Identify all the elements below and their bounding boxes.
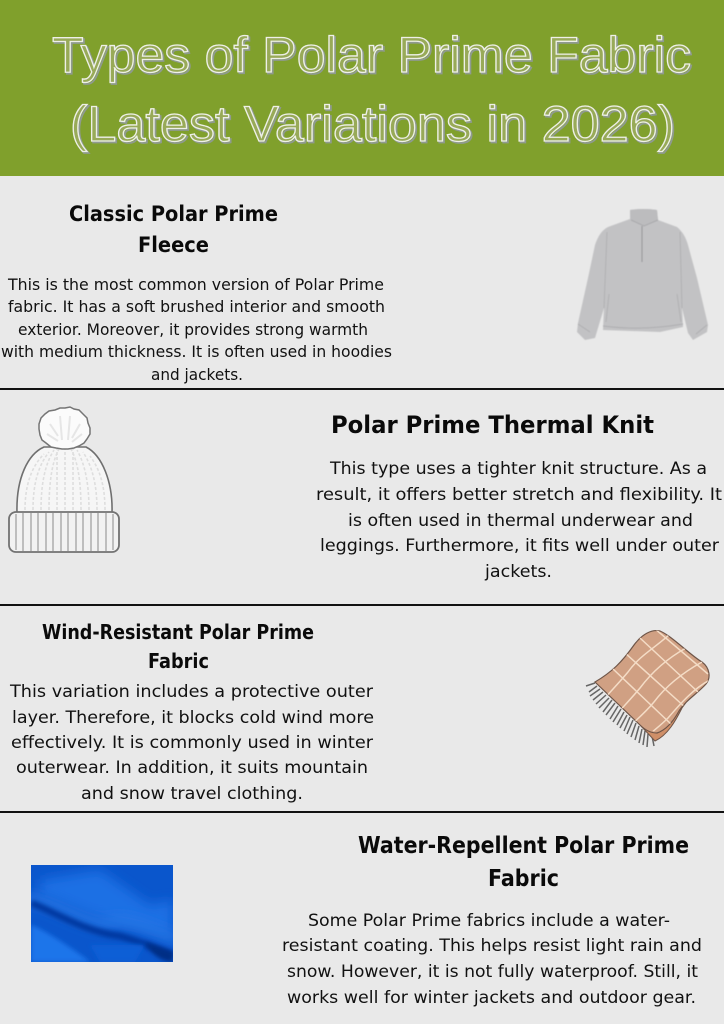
text: thermal knit description: result, it offers better stretch and flexibility. It <box>316 485 722 505</box>
icon: knit beanie <box>9 407 119 552</box>
title: (Latest Variations in 2026) <box>70 96 675 152</box>
icon: checked blanket with fringe <box>586 628 710 747</box>
photo: blue fabric swatch <box>25 865 178 962</box>
text: wind-resistant description: layer. Therefore, it blocks cold wind more <box>12 708 374 728</box>
text: classic description: exterior. Moreover, it provides strong warmth <box>18 321 368 339</box>
text: wind-resistant description <box>9 682 374 804</box>
text: classic description: This is the most common version of Polar Prime <box>7 276 384 294</box>
text: classic description: with medium thickness. It is often used in hoodies <box>1 343 392 361</box>
title banner <box>0 0 724 176</box>
heading: classic: Fleece <box>138 233 209 257</box>
heading: water-repellent: Water-Repellent Polar Prime <box>358 833 689 859</box>
text: thermal knit description <box>316 459 722 582</box>
text: water-repellent description: snow. However, it is not fully waterproof. Still, it <box>287 962 698 982</box>
text: thermal knit description: leggings. Furthermore, it fits well under outer <box>320 536 719 556</box>
heading: water-repellent <box>358 833 689 892</box>
text: water-repellent description: works well for winter jackets and outdoor gear. <box>287 988 696 1008</box>
text: thermal knit description: This type uses a tighter knit structure. As a <box>329 459 707 479</box>
heading: wind-resistant: Wind-Resistant Polar Prime <box>42 620 314 644</box>
title: (Latest Variations in 2026) <box>72 98 676 154</box>
text: wind-resistant description: outerwear. In addition, it suits mountain <box>16 758 368 778</box>
panel: wind-resistant polar prime fabric <box>9 620 710 804</box>
text: classic description: fabric. It has a soft brushed interior and smooth <box>8 298 385 316</box>
text: classic description <box>1 276 392 384</box>
text: classic description: and jackets. <box>151 366 243 384</box>
heading: classic <box>69 202 278 257</box>
divider <box>0 388 724 390</box>
panel: classic polar prime fleece <box>1 202 708 384</box>
text: water-repellent description <box>282 911 702 1008</box>
divider <box>0 811 724 813</box>
text: wind-resistant description: and snow travel clothing. <box>81 784 303 804</box>
text: thermal knit description: is often used in thermal underwear and <box>348 511 693 531</box>
title <box>52 27 692 154</box>
icon: grey fleece pullover <box>577 209 708 340</box>
title: Types of Polar Prime Fabric <box>52 27 691 83</box>
panel: water-repellent polar prime fabric <box>25 833 702 1008</box>
heading: classic: Classic Polar Prime <box>69 202 278 226</box>
text: wind-resistant description: effectively. It is commonly used in winter <box>11 733 373 753</box>
text: thermal knit description: jackets. <box>484 562 552 582</box>
heading: thermal knit: Polar Prime Thermal Knit <box>331 411 654 439</box>
heading: wind-resistant: Fabric <box>148 649 209 673</box>
heading: water-repellent: Fabric <box>488 866 559 892</box>
title: Types of Polar Prime Fabric <box>54 28 692 84</box>
text: water-repellent description: resistant coating. This helps resist light rain and <box>282 936 702 956</box>
text: wind-resistant description: This variation includes a protective outer <box>9 682 373 702</box>
divider <box>0 604 724 606</box>
text: water-repellent description: Some Polar Prime fabrics include a water- <box>308 911 670 931</box>
panel: polar prime thermal knit <box>9 407 722 582</box>
heading: wind-resistant <box>42 620 314 673</box>
